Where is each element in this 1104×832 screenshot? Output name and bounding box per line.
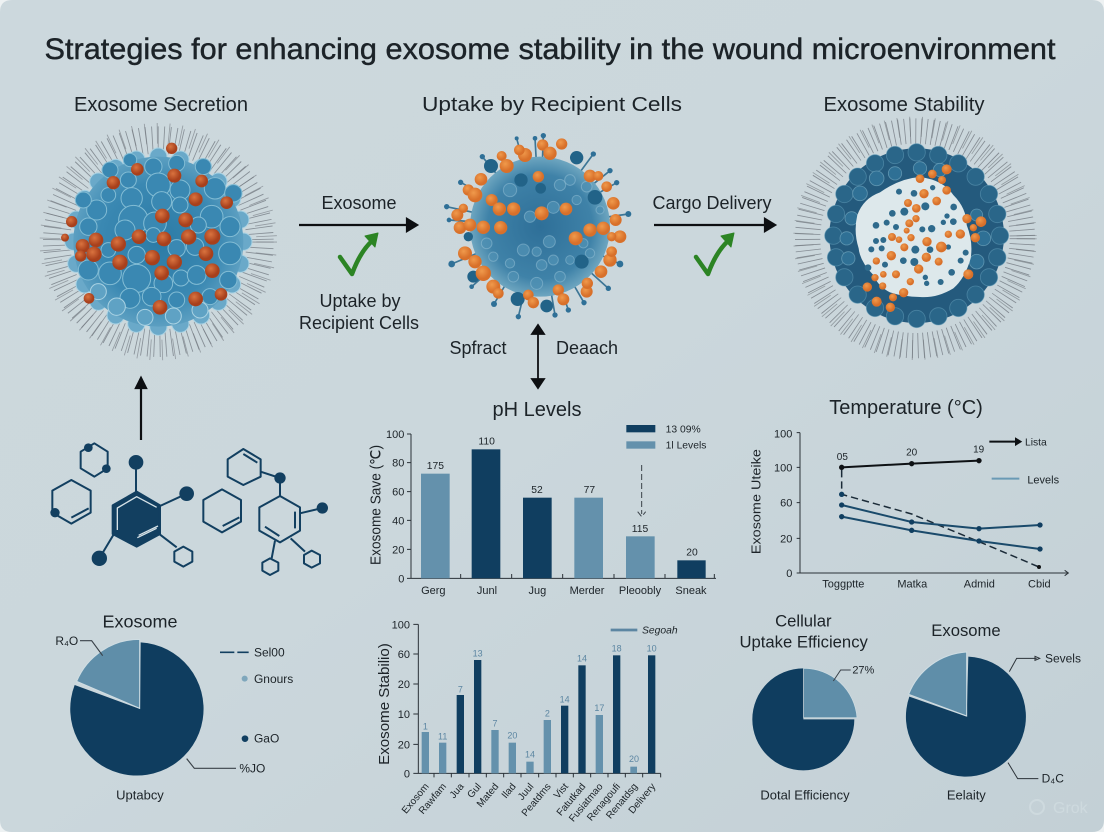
category labels: Renatdsg: [604, 782, 640, 821]
label: uptake by recipient cells: Recipient Cells: [299, 313, 419, 333]
category labels: Admid: [964, 579, 995, 591]
legend: [989, 438, 1060, 487]
category labels: Ilad: [500, 782, 519, 801]
light slice: [909, 652, 967, 716]
bar chart: pH levels: 80: [392, 458, 404, 470]
pie caption: Uptabcy: [116, 787, 164, 802]
category labels: Gerg: [421, 585, 446, 597]
value labels: 11: [438, 731, 447, 741]
arrow: double headed: [532, 325, 544, 388]
icon: green check: [696, 233, 734, 274]
legend: GaO: [254, 732, 279, 746]
bar chart: exosome stability: 20: [398, 739, 410, 751]
leader lines and arrow: [1008, 656, 1040, 779]
black series: [837, 444, 985, 470]
value labels: 20: [686, 547, 698, 558]
heading: exosome secretion: Exosome Secretion: [74, 94, 248, 116]
line chart: temperature: 100: [774, 428, 792, 440]
pie caption: Eelaity: [947, 787, 986, 802]
bar chart: exosome stability: 60: [398, 649, 410, 661]
dark slice: [70, 642, 204, 776]
arrow: cargo flow: [654, 219, 775, 231]
label: deaach: Deaach: [556, 338, 618, 358]
y axis title: Exosome Uteike: [750, 449, 764, 554]
black series: 05: [837, 452, 848, 463]
line chart: temperature: 20: [780, 533, 792, 545]
watermark: grok: [1030, 800, 1089, 817]
pie title: Exosome: [931, 621, 1001, 640]
callout labels: D₄C: [1042, 771, 1064, 785]
black series: 20: [906, 448, 918, 459]
category labels: Renagoufi: [585, 782, 623, 823]
callout labels: %JO: [239, 762, 265, 776]
category labels: [421, 585, 707, 597]
bar chart: exosome stability: 20: [398, 679, 410, 691]
dashed callout arrow: [638, 465, 646, 517]
callout labels: R₄O: [55, 634, 78, 648]
icon: green check: [340, 233, 378, 274]
y axis title: Exosome Stabilio): [377, 643, 393, 765]
bar chart: exosome stability: 0: [404, 768, 410, 780]
value labels: 14: [560, 695, 570, 705]
value labels: 13: [473, 649, 483, 659]
watermark: grok: Grok: [1053, 800, 1089, 817]
category labels: Toggptte: [822, 579, 864, 591]
category labels: Sneak: [675, 585, 707, 597]
category labels: Matka: [897, 579, 928, 591]
category labels: Delivery: [627, 782, 658, 816]
legend: [611, 625, 678, 636]
category labels: Merder: [570, 585, 605, 597]
callout labels: [55, 634, 265, 776]
illustration: exosome cross-section: [803, 127, 1027, 350]
dark slice: [752, 668, 854, 770]
value labels: 7: [458, 684, 463, 694]
line chart: temperature: 60: [780, 498, 792, 510]
percent label: 27%: [852, 665, 875, 677]
legend: Levels: [1027, 475, 1060, 487]
category labels: Exosom: [400, 782, 432, 816]
category labels: Peatdms: [520, 782, 554, 819]
y axis title: Exosome Save (℃): [369, 445, 385, 565]
value labels: 2: [545, 709, 550, 719]
title: Strategies for enhancing exosome stability in the wound microenvironment: [44, 33, 1056, 66]
value labels: 52: [531, 485, 543, 496]
category labels: Fatutkad: [555, 782, 588, 818]
category labels: Jua: [448, 781, 467, 801]
blue series: [839, 502, 1043, 552]
bar chart: exosome stability: [377, 619, 678, 824]
category labels: Fusiatmao: [567, 781, 606, 824]
value labels: 18: [612, 644, 622, 654]
pie title: Cellular: [775, 612, 832, 631]
heading: pH levels: pH Levels: [493, 399, 581, 421]
heading: exosome stability: Exosome Stability: [824, 94, 984, 116]
value labels: 14: [525, 750, 535, 760]
bar chart: pH levels: 20: [392, 544, 404, 556]
heading: temperature: Temperature (°C): [829, 397, 983, 419]
category labels: Mated: [475, 782, 501, 810]
label: exosome: Exosome: [321, 193, 397, 213]
category labels: [822, 579, 1051, 591]
category labels: Pleoobly: [619, 585, 662, 597]
value labels: 110: [478, 436, 495, 447]
leader line: [833, 670, 851, 681]
bars: [421, 449, 706, 578]
callout labels: Sevels: [1045, 651, 1081, 665]
pie title: Exosome: [103, 612, 177, 632]
category labels: Rawfam: [417, 782, 449, 817]
value labels: 20: [507, 731, 517, 741]
bar chart: exosome stability: 100: [392, 619, 410, 631]
leader lines: [80, 641, 236, 768]
bar chart: exosome stability: 10: [398, 709, 410, 721]
legend: [626, 424, 706, 452]
pie charts: cellular uptake and exosome right: [739, 612, 1081, 802]
category labels: Cbid: [1028, 579, 1051, 591]
dashed series: [839, 470, 1041, 569]
bar chart: pH levels: 60: [392, 487, 404, 499]
legend: 1l Levels: [666, 441, 706, 452]
value labels: 77: [584, 485, 595, 496]
value labels: 10: [647, 644, 657, 654]
value labels: 115: [632, 524, 648, 535]
illustration: uptake sphere: [444, 133, 631, 319]
pie chart: exosome left: [55, 612, 293, 802]
bar chart: pH levels: 100: [386, 429, 404, 441]
value labels: 17: [594, 703, 604, 713]
bar chart: pH levels: 40: [392, 515, 404, 527]
category labels: Junl: [477, 585, 497, 597]
pie title: Uptake Efficiency: [739, 633, 869, 652]
bar chart: pH levels: [369, 424, 716, 597]
bar chart: pH levels: 0: [398, 573, 404, 585]
category labels: Juul: [516, 782, 536, 803]
legend: [220, 646, 293, 746]
line chart: temperature: 0: [786, 568, 792, 580]
label: spfract: Spfract: [449, 338, 507, 358]
pie caption: Dotal Efficiency: [760, 787, 850, 802]
illustration: exosome secretion sphere: [50, 133, 267, 350]
category labels: Vist: [552, 781, 571, 801]
line chart: temperature: [750, 428, 1068, 591]
value labels: 14: [577, 654, 587, 664]
category labels: Gul: [466, 782, 484, 801]
value labels: 20: [629, 754, 639, 764]
heading: uptake by recipient cells: Uptake by Recipient Cells: [422, 94, 682, 116]
category labels: Jug: [528, 585, 546, 597]
black series: 19: [973, 444, 985, 455]
bars: [422, 655, 655, 773]
arrow: up from molecules: [136, 378, 146, 440]
label: uptake by recipient cells: Uptake by: [319, 291, 401, 311]
value labels: 1: [423, 721, 428, 731]
arrow: exosome flow: [299, 219, 417, 231]
label: cargo delivery: Cargo Delivery: [652, 193, 772, 213]
line chart: temperature: 100: [774, 462, 792, 474]
dark slice: [906, 657, 1026, 777]
legend: Sel00: [254, 646, 285, 660]
legend: Lista: [1025, 438, 1047, 449]
category labels: [400, 781, 658, 824]
legend: Gnours: [254, 672, 293, 686]
legend: Segoah: [642, 625, 678, 636]
legend: 13 09%: [666, 424, 701, 435]
light slice: [804, 668, 857, 718]
value labels: 175: [427, 461, 444, 472]
callout labels: [1042, 651, 1081, 785]
value labels: 7: [492, 719, 497, 729]
value labels: [427, 436, 698, 558]
light slice: [77, 639, 140, 708]
value labels: [423, 644, 657, 764]
icon: molecular structures: [50, 443, 328, 575]
